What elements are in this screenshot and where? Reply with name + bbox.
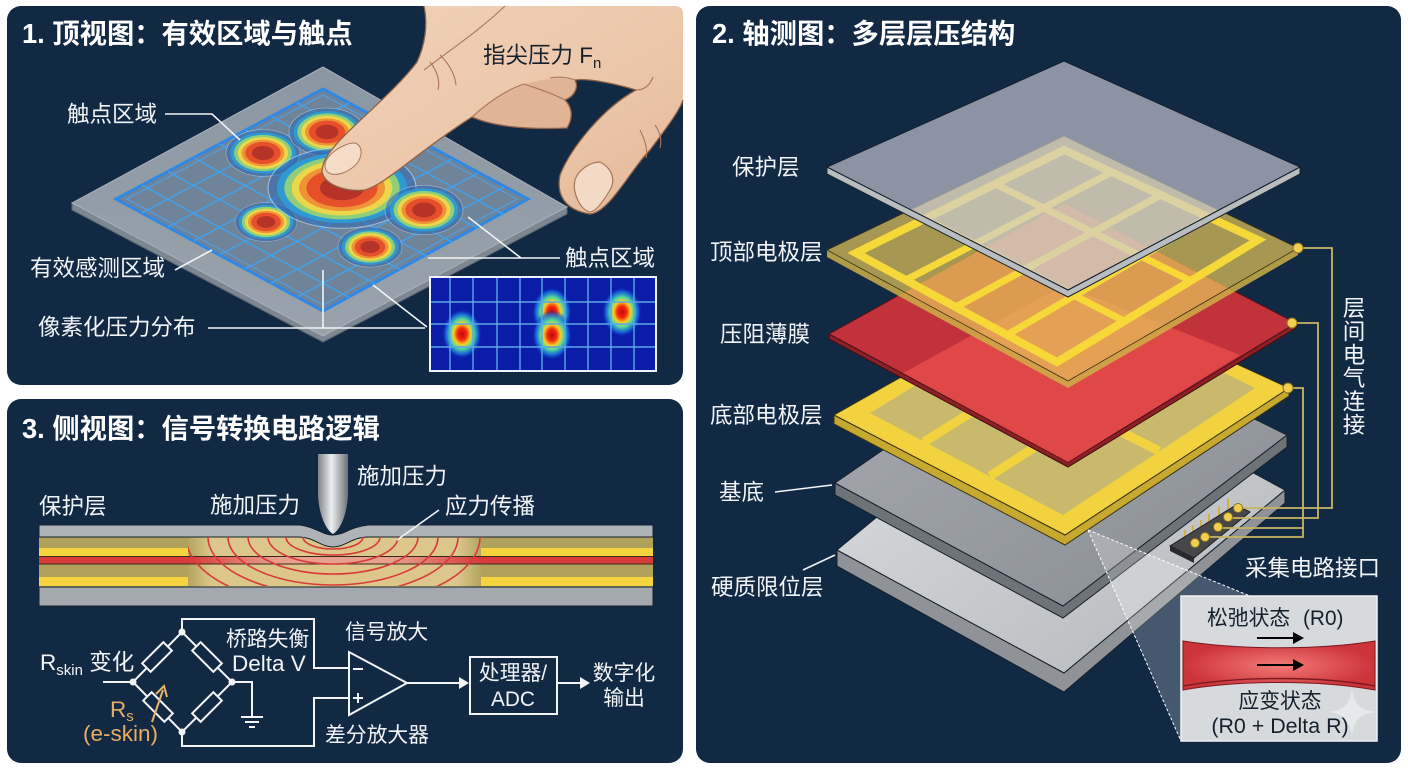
label: interlayer connection: 间 [1343, 319, 1365, 344]
strained resistor band [1183, 641, 1375, 690]
label: acquisition interface: 采集电路接口 [1245, 556, 1380, 581]
label: protective layer: 保护层 [39, 494, 107, 519]
label: interlayer connection: 层 [1343, 296, 1365, 321]
index fingernail [325, 143, 361, 174]
arrow: to output [557, 677, 590, 689]
label: fingertip force: 指尖压力 F [483, 43, 593, 68]
title: side view: 3. 侧视图：信号转换电路逻辑 [22, 413, 380, 444]
label: bottom electrode: 底部电极层 [710, 403, 823, 428]
interlayer wiring [1190, 243, 1332, 548]
label: contact area left: 触点区域 [67, 102, 157, 127]
label: contact area right: 触点区域 [565, 246, 655, 271]
leader: stress propagation [397, 510, 439, 540]
label: interlayer connection: 连 [1343, 390, 1365, 415]
label: R0 + Delta R: (R0 + Delta R) [1211, 714, 1349, 738]
heat spot 5 [385, 185, 463, 235]
processor box [470, 657, 557, 714]
layer: top electrode [827, 136, 1298, 388]
label: active sensing area: 有效感测区域 [30, 256, 165, 281]
layer: rigid limit [837, 367, 1285, 692]
leader: rigid limit [803, 555, 835, 570]
label: e-skin: (e-skin) [83, 721, 158, 746]
variable resistor arrow [152, 686, 167, 722]
label: protective layer: 保护层 [732, 155, 800, 180]
leader: active sensing area [175, 250, 212, 270]
op amp [349, 652, 407, 715]
leader: contact area right [428, 217, 560, 258]
label: applied pressure left: 施加压力 [210, 493, 300, 518]
heat spot 1 [226, 130, 300, 176]
layer: protective [827, 61, 1300, 297]
label: piezoresistive film: 压阻薄膜 [720, 322, 810, 347]
band lower edge [1183, 678, 1375, 686]
leader: contact area left [165, 114, 240, 140]
heat spot 2 [289, 108, 365, 156]
processor box: 处理器/ [479, 662, 547, 685]
sensor grid [116, 89, 530, 311]
leader: substrate [775, 485, 832, 492]
label: stress propagation: 应力传播 [445, 494, 535, 519]
glass sensor plate [72, 67, 567, 342]
laminate cross section [39, 525, 653, 606]
label: bridge imbalance: 桥路失衡 [226, 628, 309, 651]
label: Rs: s [126, 708, 134, 725]
label: Rskin change: skin [56, 662, 83, 679]
magnifier fan [1088, 530, 1250, 741]
main pressure spot [268, 148, 416, 228]
inset: strain detail [1181, 596, 1377, 741]
inset: pressure heat map [430, 277, 656, 371]
label: strained state: 应变状态 [1238, 690, 1322, 713]
heat spot 3 [235, 202, 297, 242]
thumbnail [574, 162, 613, 212]
label: Rs: R [110, 697, 126, 722]
layer: substrate [835, 325, 1287, 618]
label: differential amplifier: 差分放大器 [325, 724, 429, 747]
label: digital output: 输出 [603, 687, 645, 710]
label: delta V: Delta V [232, 651, 306, 676]
heat spot 4 [338, 227, 402, 267]
label: top electrode: 顶部电极层 [710, 240, 823, 265]
label: interlayer connection: 气 [1343, 366, 1365, 391]
title: axonometric: 2. 轴测图：多层层压结构 [712, 18, 1015, 49]
pressure probe [318, 454, 348, 534]
leader: pixelated pressure [208, 270, 427, 328]
arrow: relaxed [1257, 632, 1304, 644]
arrow: strained [1257, 659, 1304, 671]
title: top view: 1. 顶视图：有效区域与触点 [22, 18, 353, 49]
label: substrate: 基底 [719, 480, 764, 505]
bridge circuit [103, 619, 348, 746]
label: applied pressure right: 施加压力 [357, 464, 447, 489]
label: fingertip force: n [593, 55, 601, 72]
label: Rskin change: 变化 [83, 650, 134, 675]
label: relaxed state: 松弛状态 [1207, 607, 1290, 630]
stress propagation arcs [188, 537, 481, 586]
label: digital output: 数字化 [593, 662, 655, 685]
panel: 3 side view [7, 399, 683, 763]
panel: 1 top view [7, 6, 683, 385]
acquisition connector [1170, 499, 1250, 563]
processor box: ADC [491, 688, 535, 711]
label: interlayer connection: 接 [1343, 413, 1365, 438]
label: digital output [593, 662, 655, 710]
sparkle [1328, 688, 1376, 736]
panel: 2 axonometric view [696, 6, 1401, 763]
label: relaxed state: (R0) [1303, 607, 1343, 630]
label: pixelated pressure: 像素化压力分布 [38, 315, 196, 340]
label: signal amplification: 信号放大 [345, 621, 428, 644]
layer: piezoresistive film [829, 203, 1296, 467]
arrow: to processor [407, 677, 469, 689]
label: interlayer connection: 电 [1343, 343, 1365, 368]
hand [322, 6, 683, 214]
layer: bottom electrode [834, 285, 1289, 545]
label: Rskin change: R [40, 650, 56, 675]
label: rigid limit: 硬质限位层 [711, 575, 824, 600]
